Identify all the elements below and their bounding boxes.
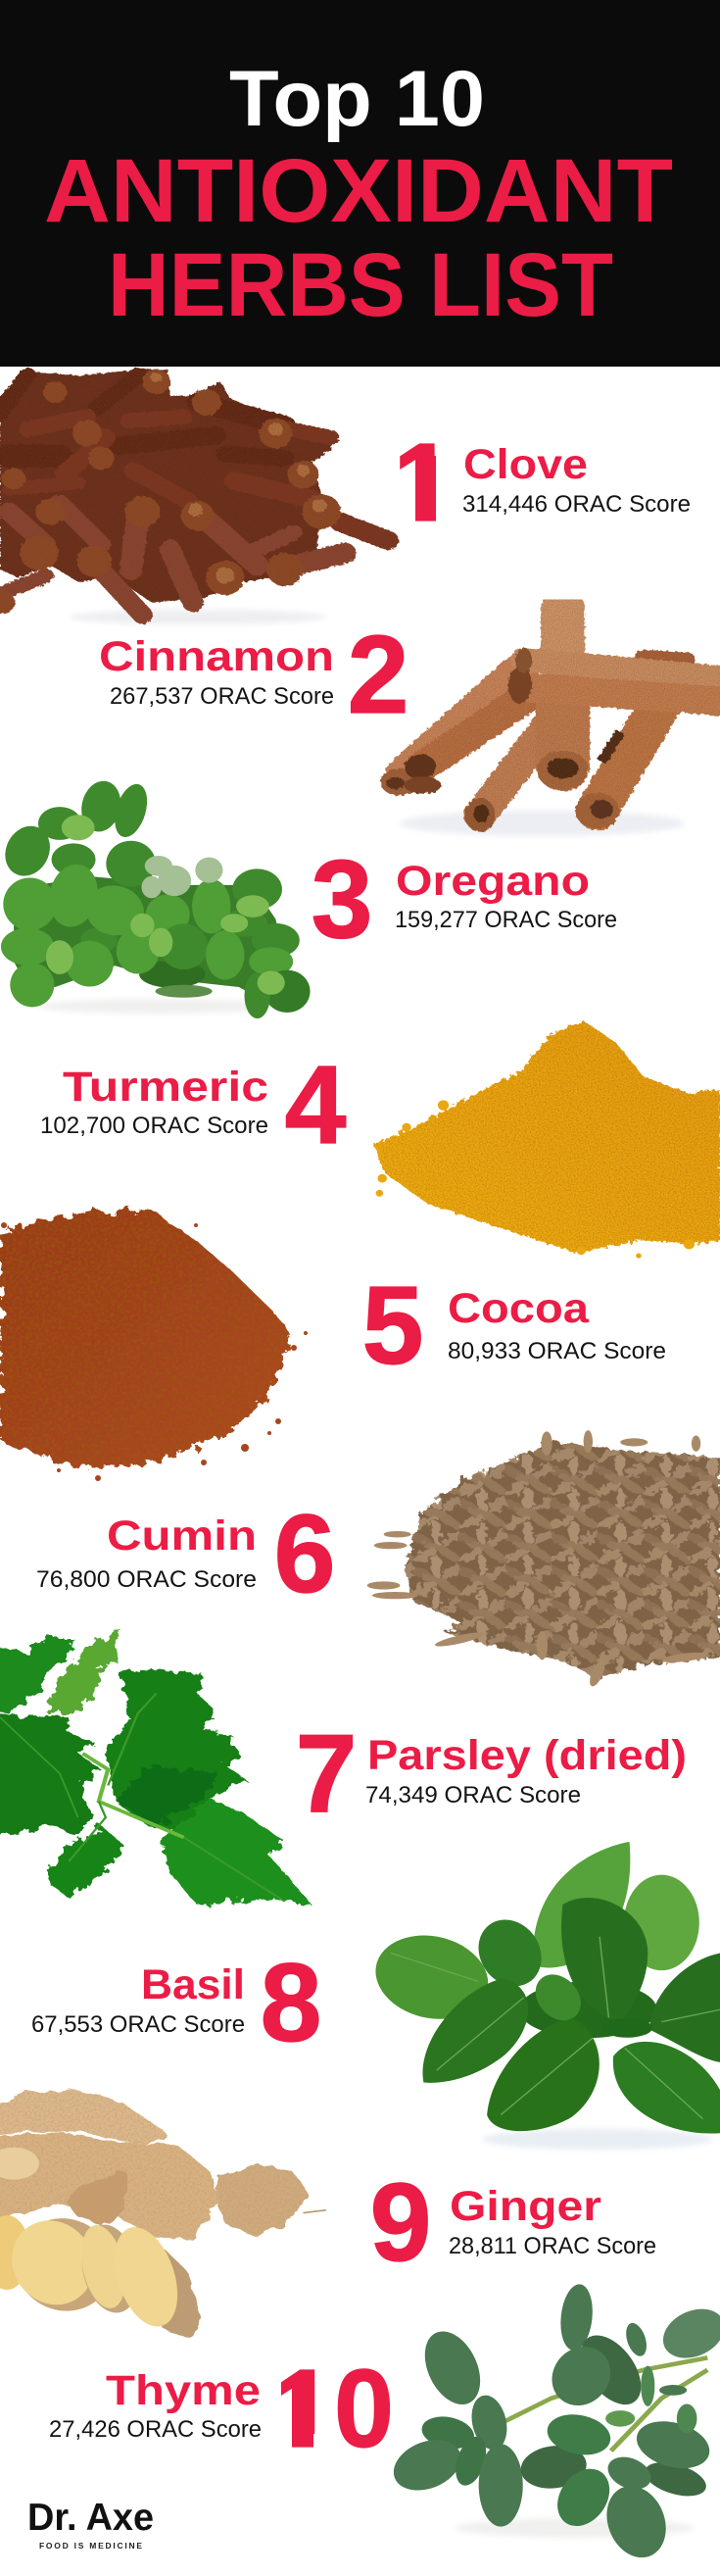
number 9: 9 [370,2160,431,2284]
number 8: 8 [261,1941,321,2064]
header banner [0,0,720,367]
name: Turmeric: Turmeric [63,1064,268,1111]
name: Thyme: Thyme [106,2367,261,2414]
image: oregano sprig [0,778,311,1018]
image: ginger root and slices [0,2095,326,2334]
title line: ANTIOXIDANT: ANTIOXIDANT [44,141,673,241]
image: parsley sprig [0,1627,312,1906]
score: Cinnamon: 267,537 ORAC Score [110,683,334,710]
score: Ginger: 28,811 ORAC Score [449,2233,656,2259]
score: Cumin: 76,800 ORAC Score [36,1566,257,1593]
name: Basil: Basil [141,1961,245,2008]
score: Clove: 314,446 ORAC Score [462,491,691,518]
panel: 3 oregano [0,778,617,1018]
name: Clove: Clove [463,441,588,488]
panel: 7 parsley [0,1627,687,1906]
number 4: 4 [285,1043,347,1166]
panel: 8 basil [31,1842,720,2150]
name: Cinnamon: Cinnamon [99,633,334,680]
name: Cocoa: Cocoa [448,1285,590,1332]
score: Cocoa: 80,933 ORAC Score [448,1338,666,1364]
score: Parsley: 74,349 ORAC Score [365,1782,581,1808]
logo tagline: FOOD IS MEDICINE [39,2541,142,2551]
name: Parsley (dried): Parsley (dried) [367,1732,687,1779]
title line: HERBS LIST: HERBS LIST [108,235,613,335]
score: Turmeric: 102,700 ORAC Score [40,1113,268,1139]
panel: 2 cinnamon [99,609,720,836]
panel: 6 cumin [36,1430,720,1688]
score: Oregano: 159,277 ORAC Score [395,907,617,933]
image: cumin seeds pile [367,1430,720,1688]
image: basil leaves [362,1842,720,2150]
score: Thyme: 27,426 ORAC Score [49,2416,262,2443]
logo: Dr. Axe [27,2497,154,2551]
panel: 1 clove [0,370,691,624]
number 3: 3 [312,837,372,961]
title line: Top 10: Top 10 [229,55,485,143]
number 7: 7 [296,1711,357,1835]
name: Cumin: Cumin [107,1512,257,1560]
name: Oregano: Oregano [396,858,590,905]
image: turmeric powder pile [374,1021,720,1259]
panel: 4 turmeric [40,1021,720,1259]
image: cloves [0,370,388,624]
image: thyme sprig [383,2283,720,2563]
image: cinnamon sticks [380,609,720,836]
logo wordmark: Dr. Axe [27,2497,154,2539]
panel: 5 cocoa [0,1211,666,1481]
panel: 10 thyme [49,2283,720,2563]
number 5: 5 [362,1263,423,1387]
name: Ginger: Ginger [450,2183,601,2230]
number 1: 1 [393,421,455,544]
number 2: 2 [348,613,408,736]
score: Basil: 67,553 ORAC Score [31,2011,245,2038]
image: cocoa powder pile [0,1211,308,1481]
number 10: 10 [274,2347,394,2470]
panel: 9 ginger [0,2095,656,2334]
number 6: 6 [274,1492,335,1615]
